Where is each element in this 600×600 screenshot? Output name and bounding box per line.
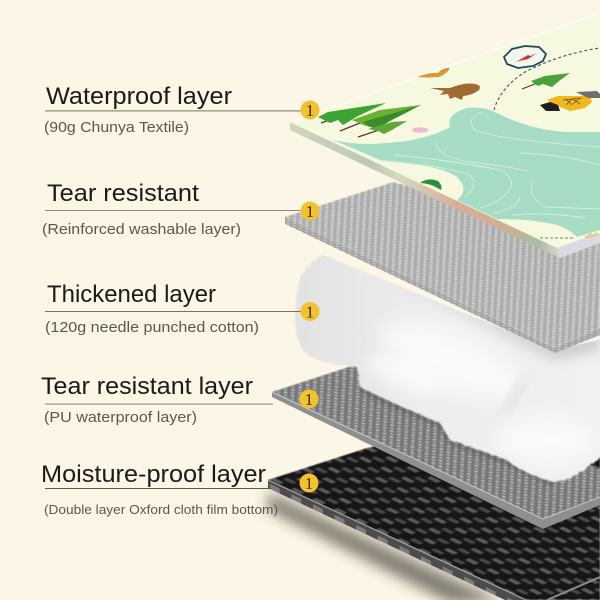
yellow stripes xyxy=(585,233,600,238)
dashed track xyxy=(494,48,600,110)
icon: tree stump xyxy=(430,84,480,100)
layer 1: printed waterproof sheet xyxy=(290,13,600,258)
label: tear resistant layer xyxy=(41,373,273,426)
label: thickened layer xyxy=(45,281,301,336)
layer 4: PU grey weave sheet xyxy=(272,365,600,529)
layer 5: black carbon sheet xyxy=(268,400,600,600)
sheet top surface xyxy=(290,13,600,248)
icon: small tree xyxy=(522,73,570,89)
label: waterproof layer xyxy=(44,83,301,136)
label: tear resistant layer: Tear resistant layer xyxy=(41,373,253,400)
shadow under black layer xyxy=(268,492,505,600)
pink spot xyxy=(412,127,428,133)
lake contour lines xyxy=(380,112,600,218)
icon: pine trees xyxy=(318,103,421,137)
badge 3 xyxy=(300,302,320,322)
badge 5 xyxy=(300,474,318,493)
label: thickened layer: (120g needle punched cotton) xyxy=(45,319,259,336)
cotton contact shadow xyxy=(360,389,553,484)
badge 3: 1 xyxy=(306,302,314,322)
icon: yellow vehicle xyxy=(540,91,600,111)
badge 4 xyxy=(300,390,318,409)
label: waterproof layer: Waterproof layer xyxy=(46,83,232,110)
layer 3: cotton xyxy=(295,248,600,482)
badge 2: 1 xyxy=(306,202,314,221)
layer 2: reinforced washable weave sheet xyxy=(285,182,600,353)
label: tear resistant: Tear resistant xyxy=(47,180,199,207)
badge 4: 1 xyxy=(305,390,313,409)
badge 5: 1 xyxy=(305,474,313,493)
badge 1 xyxy=(300,100,320,120)
label: moisture-proof layer: (Double layer Oxford cloth film bottom) xyxy=(44,502,278,517)
shore patch with bush xyxy=(420,179,442,190)
label: tear resistant: (Reinforced washable layer) xyxy=(42,221,241,238)
lake xyxy=(333,108,600,237)
sheet side edges xyxy=(290,122,600,258)
icon: compass xyxy=(504,46,546,68)
label: tear resistant xyxy=(42,180,301,238)
label: thickened layer: Thickened layer xyxy=(47,281,216,308)
label: tear resistant layer: (PU waterproof layer) xyxy=(44,409,197,426)
label: moisture-proof layer: Moisture-proof layer xyxy=(41,461,266,488)
label: moisture-proof layer xyxy=(41,461,278,517)
label: waterproof layer: (90g Chunya Textile) xyxy=(44,119,189,136)
icon: bird xyxy=(417,68,450,78)
badge 1: 1 xyxy=(306,101,314,120)
badge 2 xyxy=(300,202,320,221)
